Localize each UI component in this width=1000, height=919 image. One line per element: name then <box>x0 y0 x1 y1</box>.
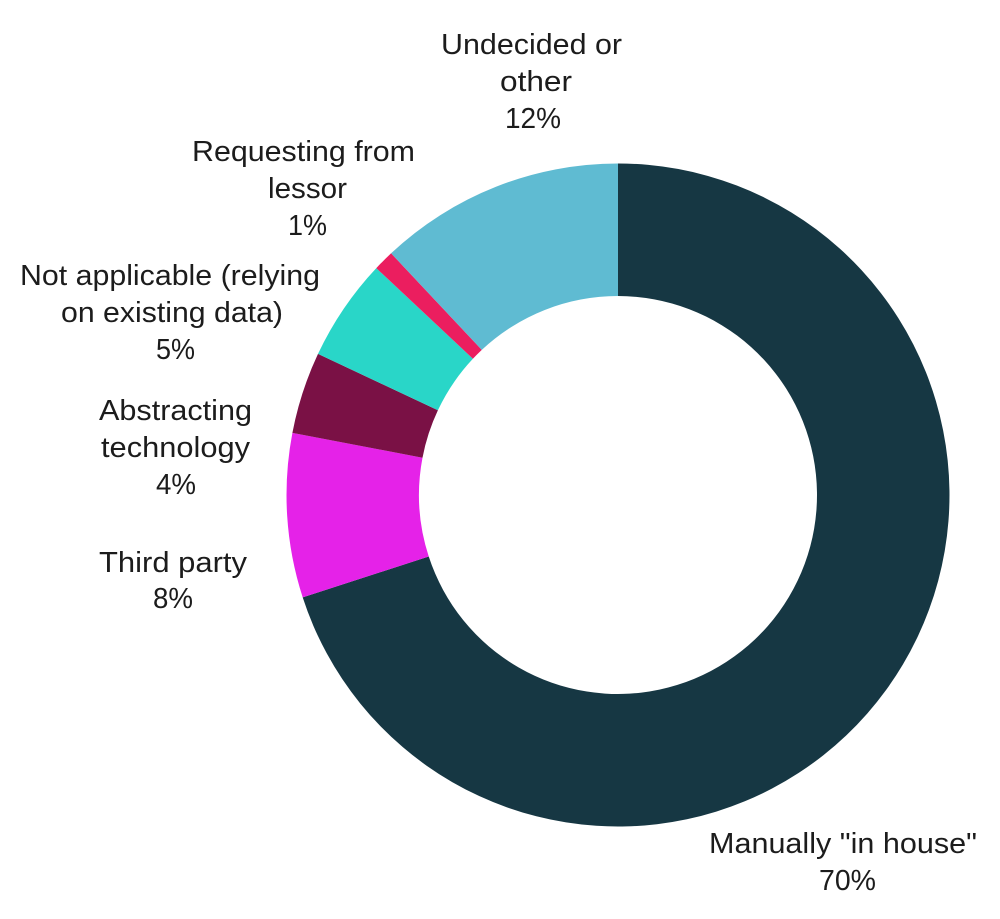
label: Third party: 8% <box>153 583 193 615</box>
slice: Manually in house 70% <box>303 164 949 826</box>
label: Undecided or other <box>441 29 622 135</box>
label: Not applicable: 5% <box>156 334 195 366</box>
donut ring <box>287 164 949 826</box>
label: Requesting from lessor: 1% <box>288 210 327 242</box>
label: Abstracting technology: Abstracting <box>99 395 252 427</box>
label: Not applicable: Not applicable (relying <box>20 260 320 292</box>
label: Undecided or other: 12% <box>505 103 561 135</box>
label: Manually in house <box>709 828 977 897</box>
slice: Requesting from lessor 1% <box>376 253 482 359</box>
label: Manually in house: Manually "in house" <box>709 828 977 860</box>
slice: Undecided or other 12% <box>391 164 618 350</box>
label: Not applicable: on existing data) <box>61 297 283 329</box>
label: Undecided or other: Undecided or <box>441 29 622 61</box>
label: Abstracting technology: 4% <box>156 469 196 501</box>
label: Manually in house: 70% <box>819 865 876 897</box>
slice: Not applicable 5% <box>318 268 473 410</box>
label: Abstracting technology <box>99 395 252 501</box>
label: Third party: Third party <box>99 547 248 579</box>
label: Requesting from lessor: Requesting from <box>192 136 415 168</box>
slice: Third party 8% <box>287 433 429 597</box>
label: Undecided or other: other <box>500 66 572 98</box>
label: Abstracting technology: technology <box>101 432 251 464</box>
label: Not applicable <box>20 260 320 366</box>
label: Requesting from lessor <box>192 136 415 242</box>
label: Requesting from lessor: lessor <box>268 173 347 205</box>
slice: Abstracting technology 4% <box>292 354 438 458</box>
label: Third party <box>99 547 248 615</box>
